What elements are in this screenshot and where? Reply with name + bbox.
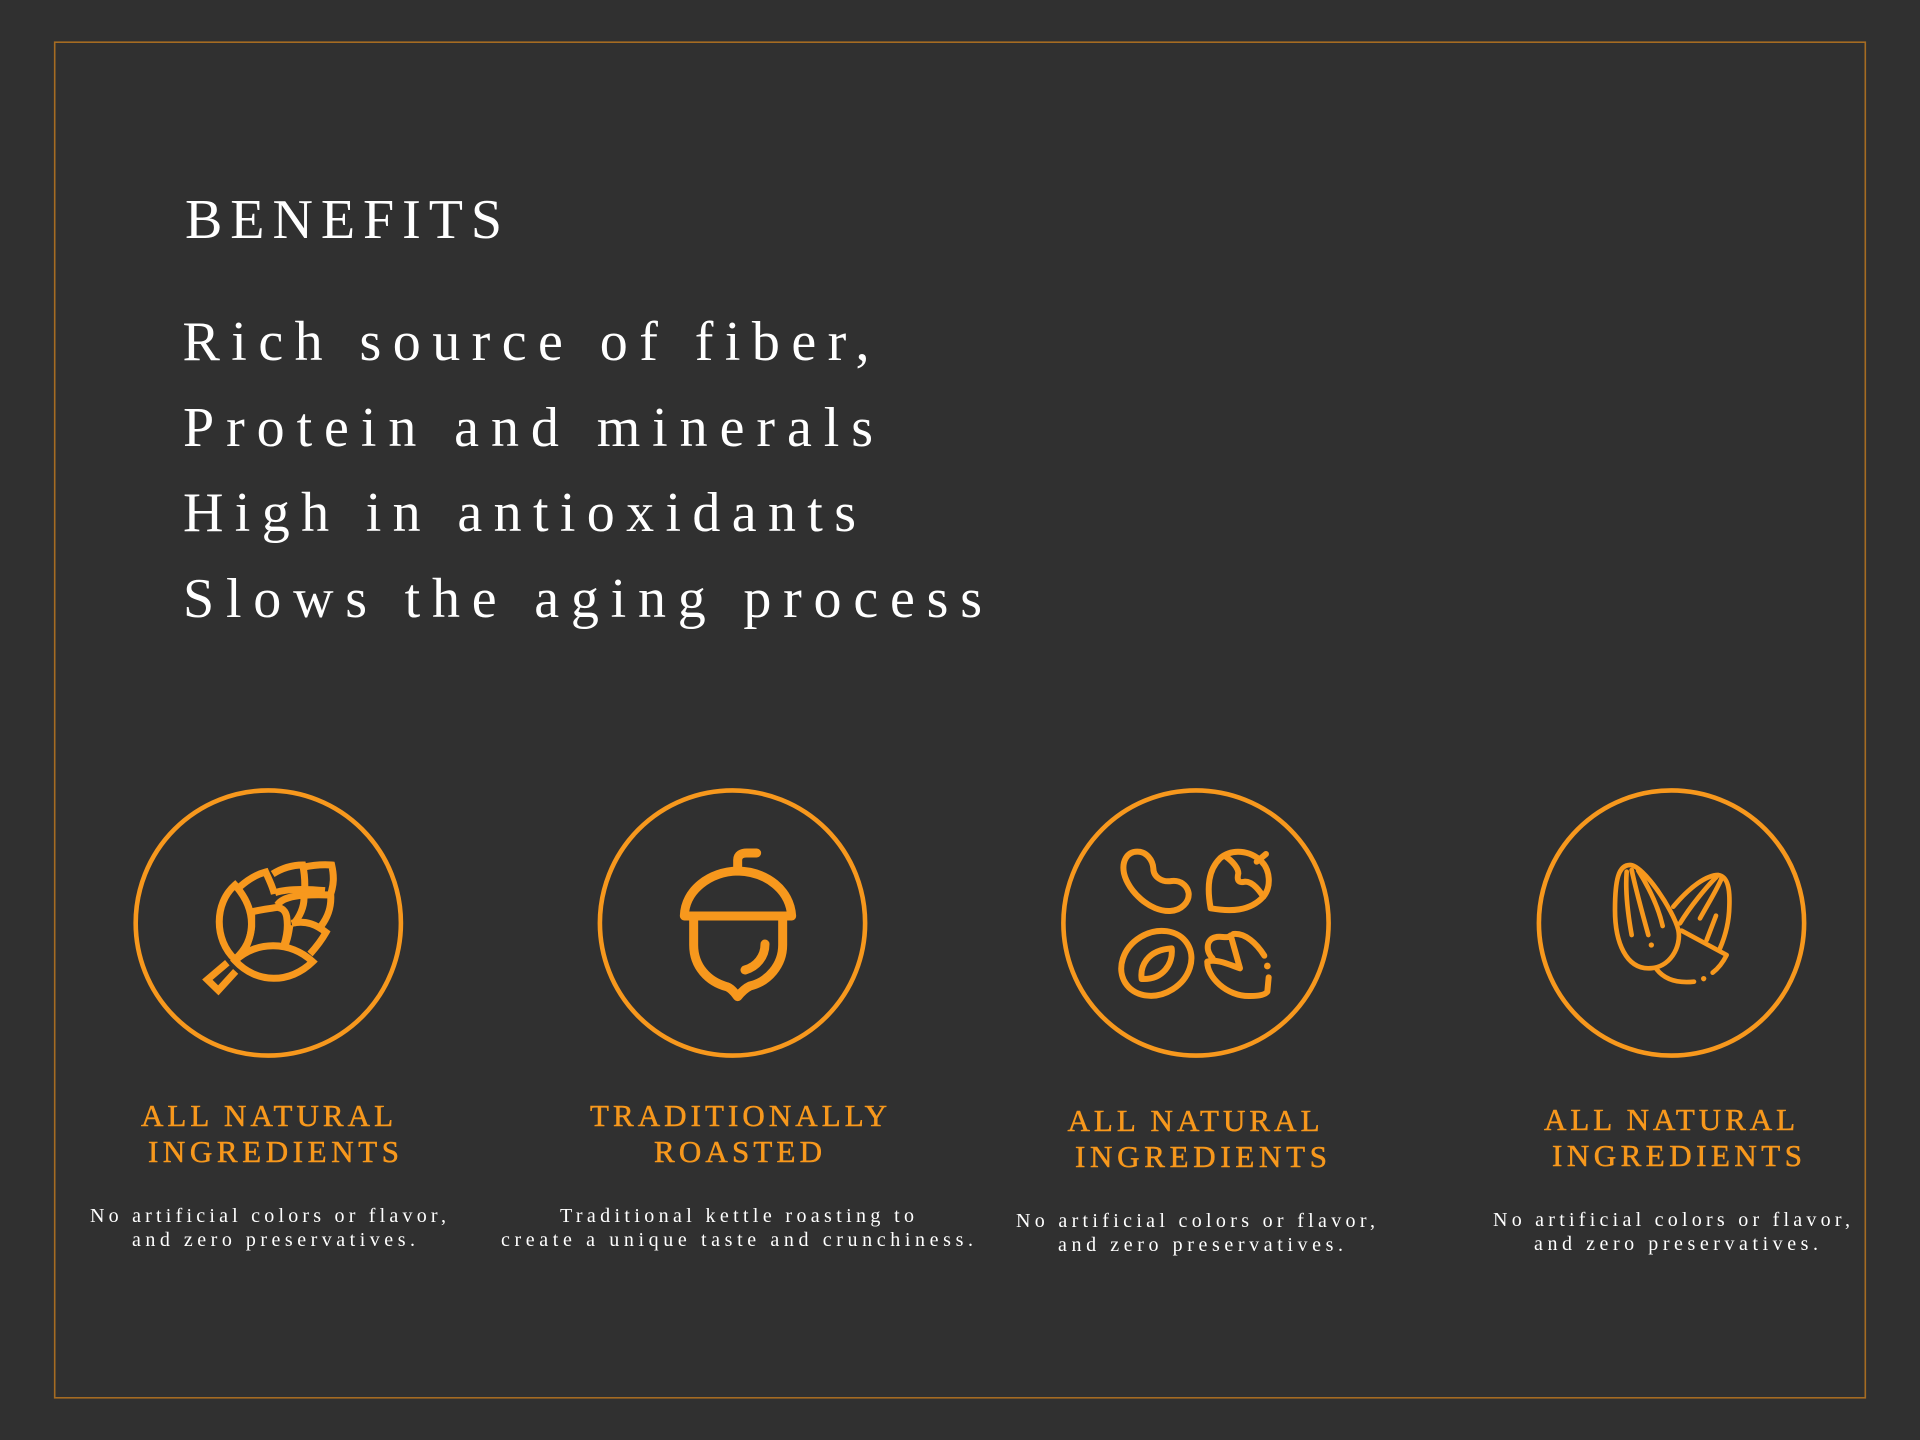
description: create a unique taste and crunchiness.: [501, 1229, 973, 1251]
heading: ALL NATURAL: [1068, 1103, 1320, 1138]
description: [501, 1205, 973, 1251]
heading: [590, 1098, 887, 1169]
description: No artificial colors or flavor,: [90, 1205, 446, 1227]
icon: hop cone: [136, 790, 401, 1056]
icon: acorn: [600, 790, 865, 1056]
icon: almonds: [1539, 790, 1804, 1056]
description: [90, 1205, 446, 1251]
panel: traditionally roasted, acorn: [501, 790, 973, 1251]
heading: INGREDIENTS: [1552, 1138, 1802, 1173]
description: and zero preservatives.: [1534, 1233, 1818, 1255]
heading: INGREDIENTS: [148, 1134, 399, 1169]
heading: [1068, 1103, 1327, 1174]
description: [1493, 1209, 1850, 1255]
benefits list: Rich source of fiber,: [182, 311, 870, 373]
heading: ALL NATURAL: [141, 1098, 393, 1133]
description: Traditional kettle roasting to: [560, 1205, 914, 1227]
title: BENEFITS: [185, 189, 502, 251]
icon: four nuts: [1063, 790, 1329, 1056]
heading: [1544, 1102, 1802, 1173]
panel: all natural ingredients, hop: [90, 790, 446, 1251]
benefits list: High in antioxidants: [183, 482, 856, 544]
benefits list: [182, 311, 982, 630]
heading: ROASTED: [654, 1134, 822, 1169]
description: No artificial colors or flavor,: [1493, 1209, 1850, 1231]
description: [1016, 1210, 1375, 1256]
benefits list: Protein and minerals: [183, 397, 873, 459]
heading: TRADITIONALLY: [590, 1098, 887, 1133]
description: No artificial colors or flavor,: [1016, 1210, 1375, 1232]
panel: all natural ingredients, almonds: [1493, 790, 1850, 1255]
panel: all natural ingredients, nuts: [1016, 790, 1375, 1256]
benefits list: Slows the aging process: [183, 568, 982, 630]
description: and zero preservatives.: [132, 1229, 415, 1251]
description: and zero preservatives.: [1058, 1234, 1343, 1256]
heading: INGREDIENTS: [1075, 1139, 1327, 1174]
heading: ALL NATURAL: [1544, 1102, 1795, 1137]
heading: [141, 1098, 399, 1169]
